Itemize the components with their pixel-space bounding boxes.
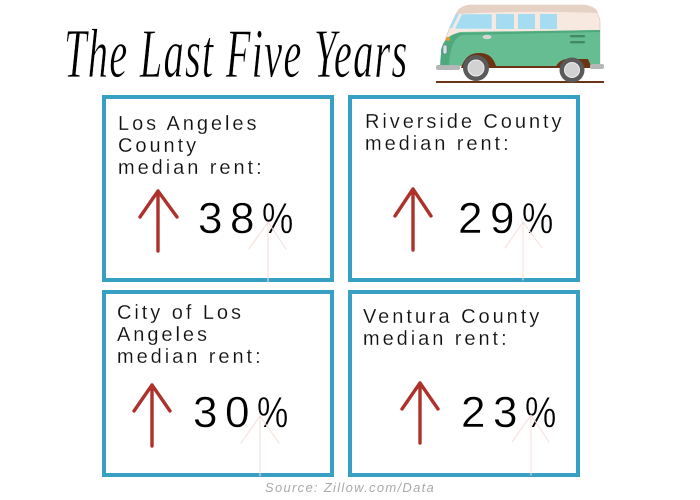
value: 23%: 23 [461,388,525,437]
value: 38% [198,194,299,243]
value: 38%: 38 [198,194,262,243]
label: Los Angeles County median rent [118,113,265,179]
value: 29%: 29 [458,194,522,243]
label: Riverside County median rent [365,111,564,155]
panel: Los Angeles County [102,95,334,282]
label: City of Los Angeles median rent: Angeles [117,324,210,346]
value: 23%: % [525,388,562,437]
panel: Riverside County [348,95,580,282]
label: Ventura County median rent: median rent: [363,328,510,350]
source note: Source: Zillow.com/Data [265,480,435,495]
ghost arrow, Ventura County [512,415,549,475]
panel: Ventura County [348,290,580,477]
label: Riverside County median rent: median rent: [365,133,512,155]
arrow: up, Riverside County [395,189,431,250]
label: Los Angeles County median rent: median rent: [118,157,265,179]
value: 29% [458,194,559,243]
label: Ventura County median rent: Ventura County [363,306,542,328]
label: City of Los Angeles median rent: median rent: [117,346,264,368]
arrow: up, Ventura County [402,383,438,443]
ghost arrow, Los Angeles County [249,222,286,283]
value: 30%: % [257,388,294,437]
value: 38%: % [262,194,299,243]
label: Los Angeles County median rent: County [118,135,199,157]
value: 29%: % [522,194,559,243]
value: 23% [461,388,562,437]
ghost arrow, Riverside County [505,222,542,280]
arrow: up, City of Los Angeles [134,385,170,446]
ghost arrow, City of Los Angeles [241,416,279,476]
value: 30% [193,388,294,437]
label: Los Angeles County median rent: Los Angeles [118,113,259,135]
label: City of Los Angeles median rent [117,302,264,368]
value: 30%: 30 [193,388,257,437]
label: Ventura County median rent [363,306,542,350]
label: Riverside County median rent: Riverside County [365,111,564,133]
label: City of Los Angeles median rent: City of Los [117,302,244,324]
title: The Last Five Years [64,14,409,92]
arrow: up, Los Angeles County [140,191,177,251]
panel: City of Los Angeles [102,290,334,477]
